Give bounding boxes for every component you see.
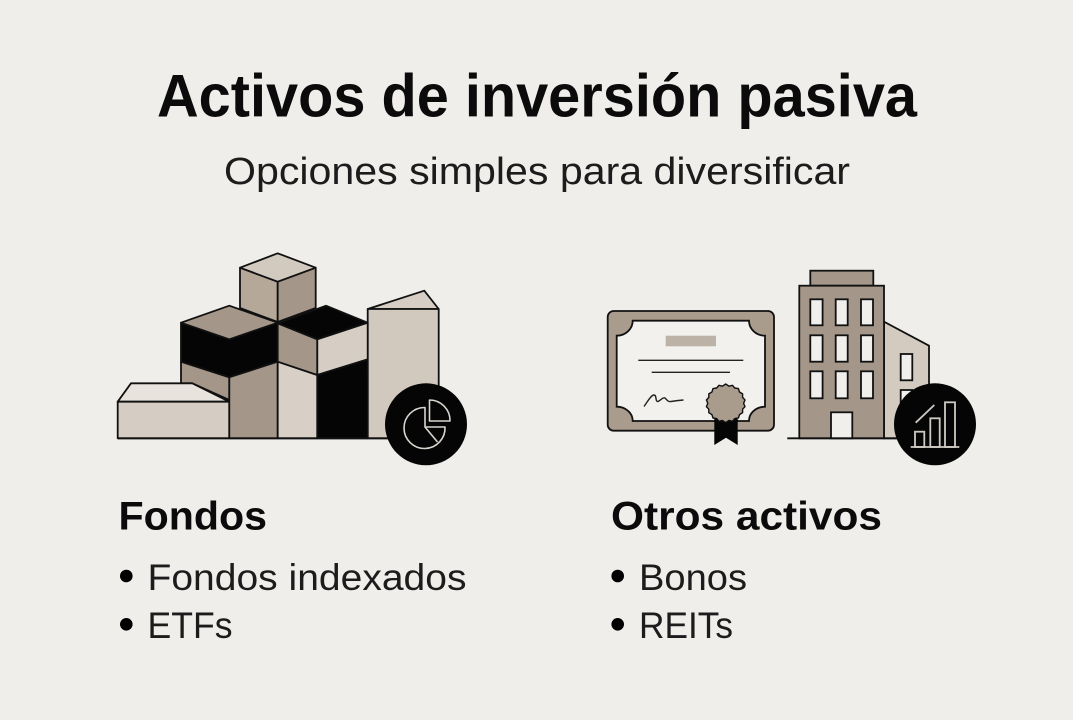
heading: Fondos: Fondos xyxy=(118,494,267,538)
list item: REITs: REITs xyxy=(639,605,733,646)
windows xyxy=(810,299,873,398)
low block xyxy=(118,362,229,438)
list item: Fondos indexados: Fondos indexados xyxy=(148,557,466,598)
certificate paper xyxy=(617,321,765,421)
side building xyxy=(884,322,929,438)
top cube xyxy=(240,253,316,322)
door xyxy=(831,412,852,438)
illustration: buildings xyxy=(787,271,929,438)
text lines xyxy=(638,360,743,372)
tall block xyxy=(368,291,439,438)
illustration: stacked blocks xyxy=(118,253,439,438)
left cube xyxy=(181,306,317,438)
title: Activos de inversión pasiva xyxy=(157,63,918,130)
list item: Bonos: Bonos xyxy=(639,557,747,598)
signature xyxy=(644,395,684,406)
panel: Fondos xyxy=(118,494,466,646)
icon: bar chart badge xyxy=(894,383,976,465)
certificate frame xyxy=(608,311,774,431)
ribbon xyxy=(714,419,738,445)
heading: Otros activos: Otros activos xyxy=(611,494,882,538)
icon: pie chart badge xyxy=(385,383,467,465)
illustration: certificate xyxy=(608,311,774,445)
certificate heading bar xyxy=(666,336,716,346)
rooftop xyxy=(810,271,873,286)
list item: ETFs: ETFs xyxy=(148,605,232,646)
middle cube xyxy=(278,306,368,438)
ground line xyxy=(787,437,905,439)
panel: Otros activos xyxy=(611,494,882,646)
seal xyxy=(706,384,745,423)
baseline xyxy=(118,437,400,439)
subtitle: Opciones simples para diversificar xyxy=(224,151,850,193)
main building xyxy=(799,286,884,438)
